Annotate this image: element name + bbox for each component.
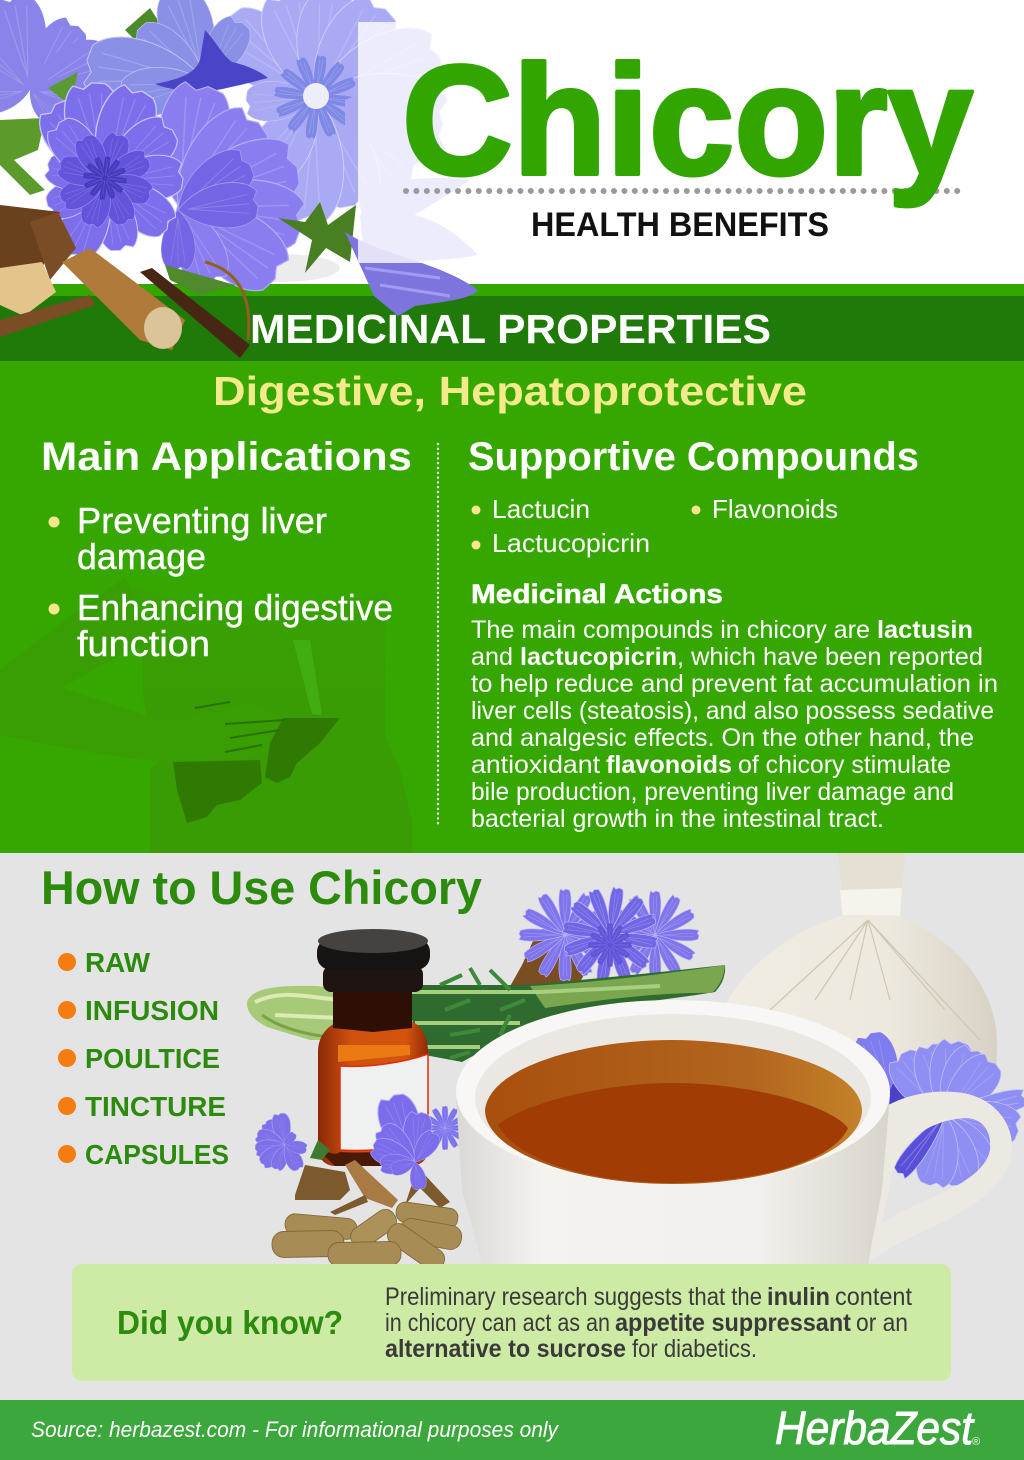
list: main applications: damage <box>77 536 206 577</box>
image: capsules <box>272 1201 463 1274</box>
paragraph: medicinal actions: flavonoids <box>606 751 732 779</box>
green properties panel background <box>0 361 1024 853</box>
translucent white title panel <box>358 22 1024 263</box>
image: flower behind cup handle <box>849 1028 1024 1190</box>
callout heading: Did you know? <box>117 1304 343 1341</box>
paragraph: medicinal actions: and <box>471 643 513 671</box>
paragraph: medicinal actions: The main compounds in chicory are <box>471 616 870 644</box>
paragraph: medicinal actions: liver cells (steatosis), and also possess sedative <box>471 697 994 725</box>
flower light large <box>204 0 451 225</box>
list: forms of use: RAW <box>85 947 151 978</box>
callout text: alternative to sucrose <box>385 1335 626 1363</box>
list: forms of use: INFUSION <box>85 995 219 1026</box>
paragraph: medicinal actions: and analgesic effects. On the other hand, the <box>471 724 974 752</box>
callout: did you know <box>72 1264 951 1381</box>
image: chicory leaf <box>247 965 725 1062</box>
paragraph: medicinal actions: to help reduce and prevent fat accumulation in <box>471 670 998 698</box>
list: main applications: Enhancing digestive <box>77 587 393 628</box>
list: main applications: function <box>77 623 210 664</box>
footer band <box>0 1400 1024 1460</box>
callout text: appetite suppressant <box>615 1309 852 1337</box>
paragraph: medicinal actions <box>471 616 998 833</box>
green top band <box>0 284 1024 296</box>
title: Chicory <box>402 34 973 208</box>
paragraph: medicinal actions: lactucopicrin <box>520 643 677 671</box>
callout text <box>385 1283 912 1363</box>
roots by bottle <box>295 1160 450 1215</box>
list: compounds: Lactucin <box>492 494 590 524</box>
flower dark top <box>81 0 257 121</box>
image: tea cup <box>456 1000 1012 1264</box>
blurred flower top left <box>0 0 117 128</box>
image: poultice pouch <box>720 853 997 1130</box>
image: small flowers beside bottle <box>254 1090 467 1215</box>
grey usage panel background <box>0 853 1024 1400</box>
flower middle <box>144 78 307 303</box>
list: forms of use: TINCTURE <box>85 1091 226 1122</box>
flower front purple <box>31 79 185 266</box>
paragraph: medicinal actions: , which have been reported <box>677 643 983 671</box>
callout text: inulin <box>767 1283 830 1311</box>
dotted column divider <box>437 444 439 828</box>
callout text: in chicory can act as an <box>385 1309 610 1337</box>
image: woman silhouette with liver <box>0 578 412 853</box>
roots <box>0 205 60 290</box>
image: amber bottle <box>317 929 430 1166</box>
subtitle: HEALTH BENEFITS <box>531 206 829 244</box>
registered mark: ® <box>972 1436 980 1448</box>
dotted divider under title <box>406 188 966 194</box>
paragraph: medicinal actions: lactusin <box>877 616 973 644</box>
list: compounds: Lactucopicrin <box>492 528 650 558</box>
list: compounds <box>472 494 838 558</box>
footer source text: Source: herbazest.com - For informational purposes only <box>31 1417 560 1442</box>
callout text: Preliminary research suggests that the <box>385 1283 762 1311</box>
image: chicory flowers and roots <box>0 0 478 358</box>
list: main applications: Preventing liver <box>77 500 327 541</box>
paragraph: medicinal actions: of chicory stimulate <box>738 751 951 779</box>
logo: HerbaZest: HerbaZest <box>775 1402 975 1454</box>
page background white <box>0 0 1024 284</box>
heading: main applications: Main Applications <box>41 435 412 479</box>
list: forms of use: POULTICE <box>85 1043 220 1074</box>
list: compounds: Flavonoids <box>712 494 838 524</box>
heading: medicinal properties: MEDICINAL PROPERTIES <box>250 306 771 352</box>
image: chicory flower bunch with roots <box>508 879 699 991</box>
green sepals <box>278 202 356 273</box>
list: forms of use: CAPSULES <box>85 1139 229 1170</box>
callout text: or an <box>856 1309 908 1337</box>
subheading: properties: Digestive, Hepatoprotective <box>213 368 807 414</box>
paragraph: medicinal actions: bacterial growth in the intestinal tract. <box>471 805 884 833</box>
flower bud <box>345 94 478 262</box>
list: forms of use <box>58 947 229 1170</box>
heading: medicinal actions: Medicinal Actions <box>471 579 723 609</box>
callout text: for diabetics. <box>632 1335 757 1363</box>
paragraph: medicinal actions: antioxidant <box>471 751 600 779</box>
list: main applications <box>48 500 393 664</box>
heading: how to use chicory: How to Use Chicory <box>41 861 482 914</box>
dark green heading band <box>0 296 1024 362</box>
heading: supportive compounds: Supportive Compounds <box>468 435 919 479</box>
paragraph: medicinal actions: bile production, preventing liver damage and <box>471 778 954 806</box>
callout text: content <box>835 1283 912 1311</box>
